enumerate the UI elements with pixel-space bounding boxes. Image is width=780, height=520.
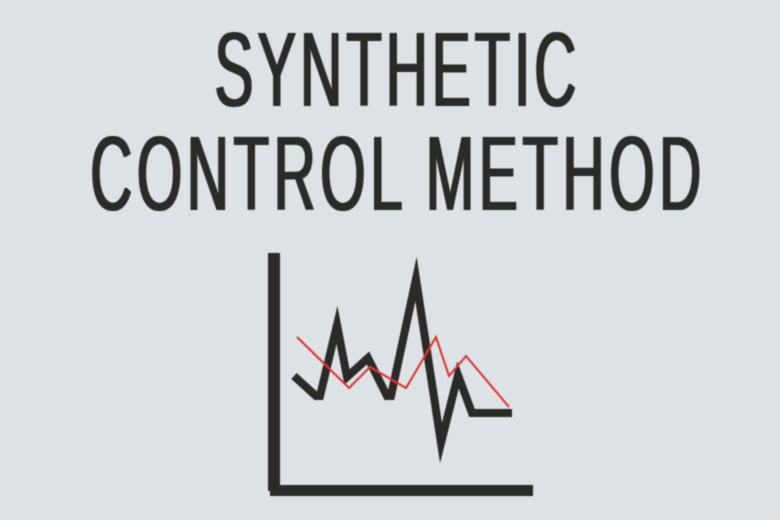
title: CONTROL METHOD <box>90 116 701 234</box>
line chart icon <box>268 253 533 496</box>
title <box>90 12 701 234</box>
black data line <box>294 279 512 443</box>
red synthetic control line <box>297 337 509 407</box>
chart axes <box>268 253 533 496</box>
title: SYNTHETIC <box>215 12 576 130</box>
